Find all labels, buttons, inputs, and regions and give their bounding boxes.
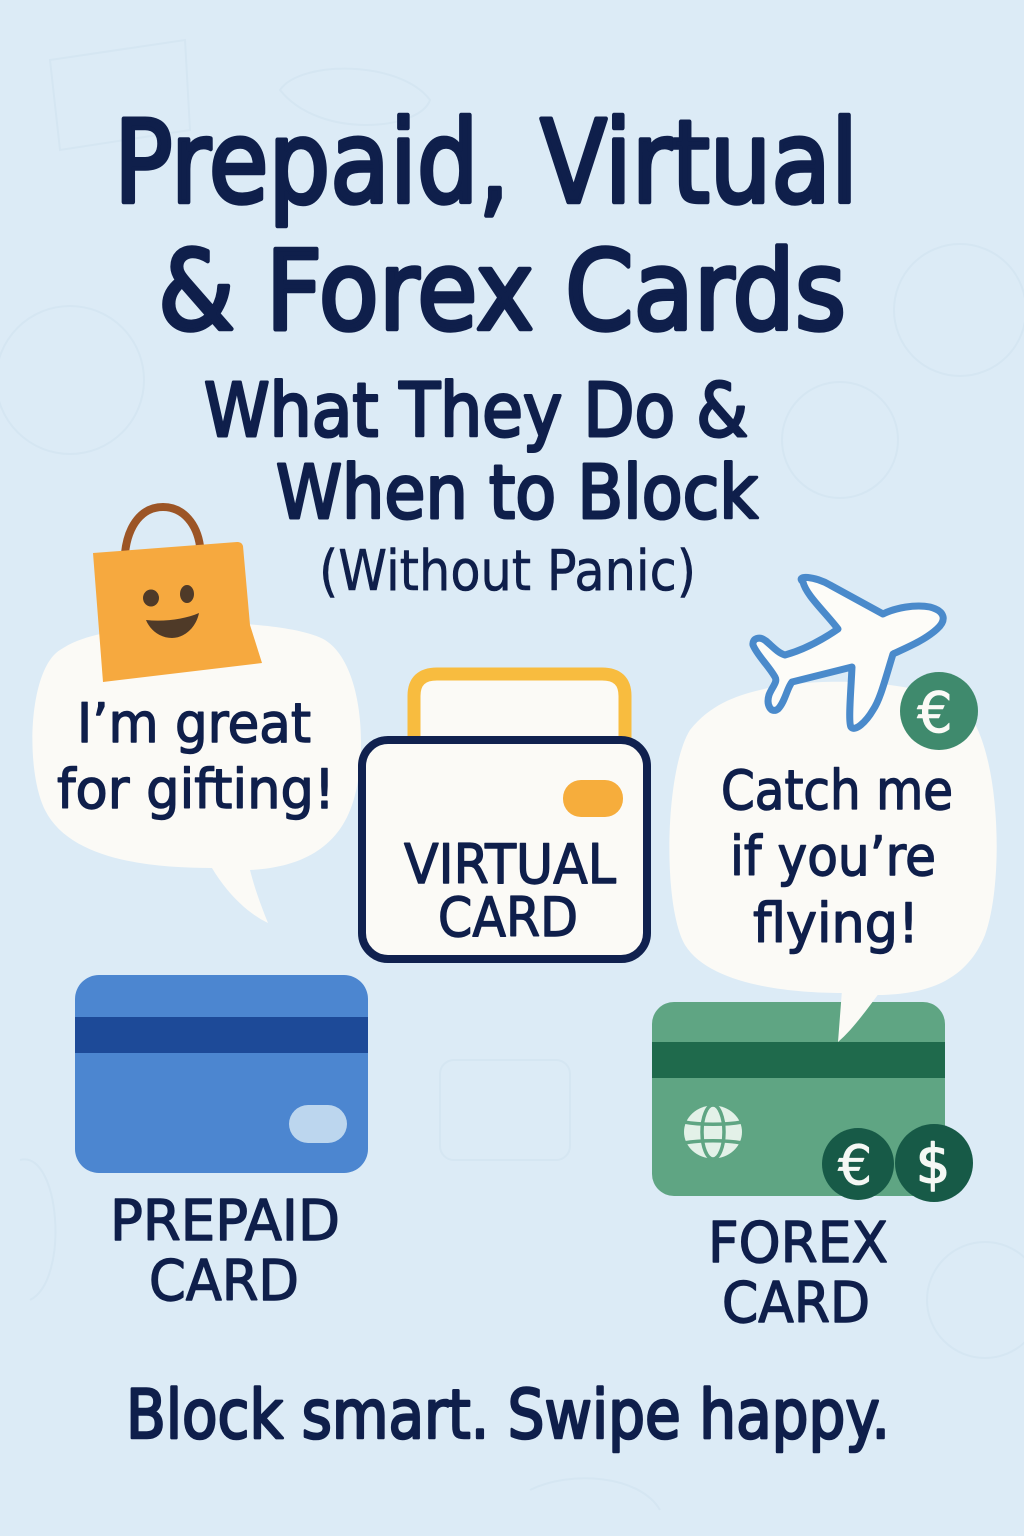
bubble text: gifting: I’m great (77, 692, 311, 755)
virtual card label: CARD (438, 886, 578, 949)
icon: euro badge (900, 672, 978, 750)
bubble text: flying: Catch me (721, 759, 953, 822)
speech bubble: gifting (32, 623, 361, 923)
virtual card label (404, 833, 616, 949)
virtual card (362, 674, 647, 959)
subtitle: What They Do & (204, 368, 748, 454)
icon: euro and dollar coins: € (838, 1134, 872, 1197)
prepaid card label: PREPAID (110, 1189, 340, 1254)
subtitle: When to Block (276, 450, 758, 536)
icon: euro and dollar coins (822, 1124, 973, 1202)
forex card label (708, 1211, 888, 1336)
icon: euro badge: € (917, 681, 953, 746)
icon: shopping bag (93, 507, 262, 682)
title: Prepaid, Virtual (114, 96, 858, 229)
bubble text: gifting (57, 692, 335, 821)
icon: globe (684, 1105, 742, 1159)
forex card label: CARD (722, 1271, 870, 1336)
prepaid card (75, 975, 368, 1173)
bubble text: flying: if you’re (730, 825, 936, 888)
title (114, 96, 858, 355)
bubble text: gifting: for gifting! (57, 758, 335, 821)
prepaid card label (110, 1189, 340, 1314)
tagline: Block smart. Swipe happy. (126, 1376, 890, 1455)
forex card label: FOREX (708, 1211, 888, 1276)
icon: euro and dollar coins: $ (916, 1133, 950, 1196)
bubble text: flying: flying! (753, 892, 919, 955)
prepaid card label: CARD (149, 1249, 299, 1314)
subtitle (204, 368, 758, 604)
speech bubble: flying (669, 682, 997, 1042)
icon: airplane (753, 577, 943, 728)
subtitle: (Without Panic) (319, 539, 696, 604)
forex card (652, 1002, 945, 1196)
title: & Forex Cards (158, 227, 846, 355)
speech bubble tail over forex card (838, 990, 880, 1042)
virtual card label: VIRTUAL (404, 833, 616, 896)
bubble text: flying (721, 759, 953, 955)
